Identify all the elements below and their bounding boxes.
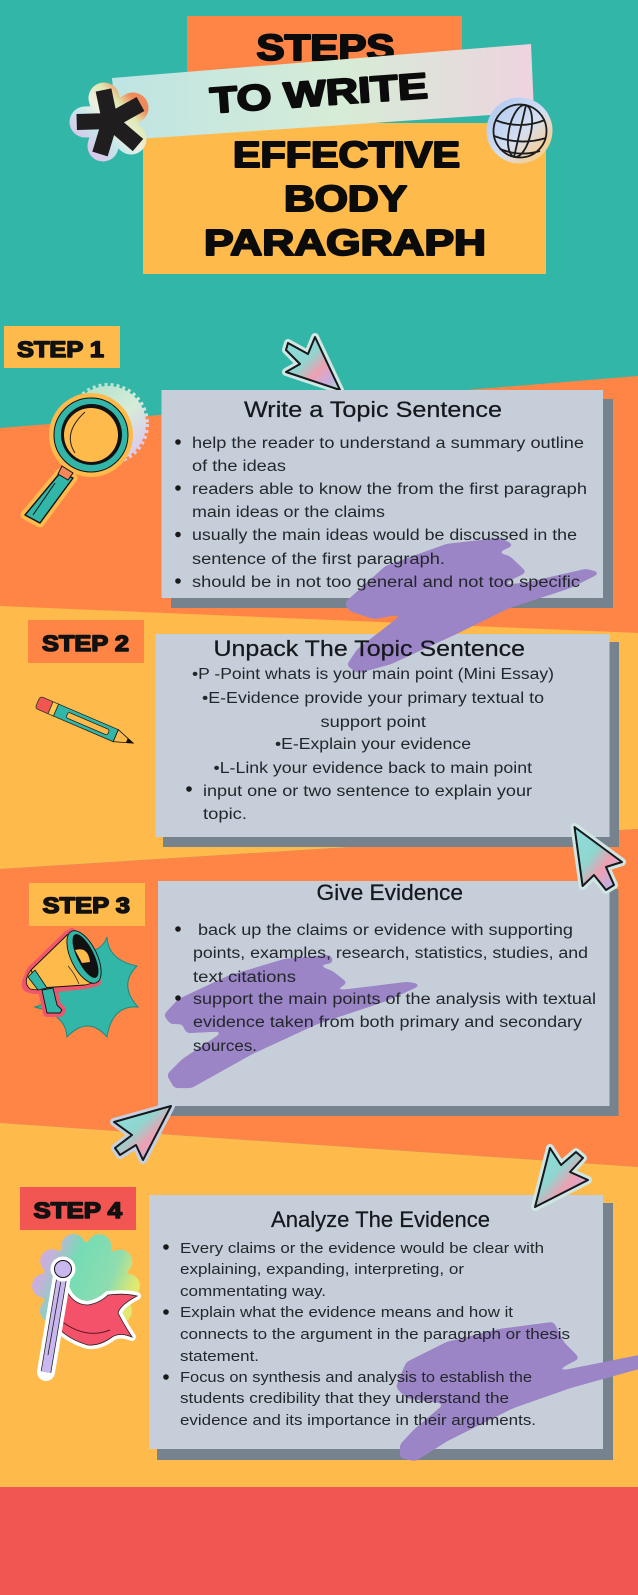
- panel shadow: [171, 399, 613, 608]
- bullet list: back up the claims or evidence with supporting: [198, 922, 573, 939]
- brush stroke: [165, 956, 419, 1087]
- bullet list: main ideas or the claims: [192, 504, 385, 521]
- bullet list: sentence of the first paragraph.: [192, 551, 445, 568]
- step 1 label: STEP 1: [17, 337, 104, 362]
- icon: pencil: [35, 696, 136, 749]
- bullet list: Focus on synthesis and analysis to establish the: [180, 1369, 532, 1386]
- panel shadow: [157, 1203, 613, 1460]
- panel card: [158, 881, 610, 1106]
- icon: cursor 4: [535, 1148, 588, 1207]
- bullet list: [163, 1240, 570, 1429]
- title block: [77, 16, 552, 274]
- heading: PARAGRAPH: PARAGRAPH: [204, 222, 486, 263]
- step 2 label: STEP 2: [42, 631, 129, 656]
- bullet list: support the main points of the analysis with textual: [193, 991, 596, 1008]
- text lines: support point: [320, 714, 427, 731]
- icon: cursor 3: [114, 1106, 171, 1160]
- heading: STEPS: STEPS: [256, 27, 394, 68]
- bullet list: Every claims or the evidence would be clear with: [180, 1240, 544, 1257]
- bullet list: text citations: [193, 969, 296, 986]
- icon: globe sticker: [486, 98, 552, 164]
- bullet list: [175, 435, 587, 591]
- panel card: [156, 634, 610, 837]
- panel: step 3: [158, 880, 618, 1116]
- text lines: input one or two sentence to explain your: [203, 783, 532, 800]
- step 4 label: STEP 4: [34, 1198, 123, 1223]
- heading: EFFECTIVE: EFFECTIVE: [233, 134, 460, 175]
- panel shadow: [168, 889, 618, 1116]
- panel card: [149, 1195, 603, 1449]
- icon: megaphone with burst: [26, 926, 138, 1037]
- bullet list: [175, 922, 596, 1055]
- panel: step 2: [156, 634, 619, 847]
- background: yellow band 1: [0, 606, 638, 869]
- icon: flag: [42, 1242, 137, 1372]
- brush stroke overlap: [348, 634, 456, 672]
- bullet list: should be in not too general and not too specific: [192, 574, 580, 591]
- text lines: •P -Point whats is your main point (Mini Essay): [192, 666, 554, 683]
- bullet list: statement.: [180, 1348, 259, 1365]
- brush stroke: [397, 1323, 638, 1460]
- step 1 label: [4, 326, 120, 368]
- heading: BODY: BODY: [284, 178, 407, 219]
- bullet list: students credibility that they understand the: [180, 1390, 509, 1407]
- panel card: [162, 390, 603, 598]
- step 4 label: [20, 1187, 136, 1230]
- text lines: topic.: [203, 806, 247, 823]
- heading: TO WRITE: TO WRITE: [209, 65, 429, 121]
- bullet list: evidence taken from both primary and secondary: [193, 1014, 582, 1031]
- heading: Unpack The Topic Sentence: [214, 636, 525, 661]
- icon: asterisk sticker: [77, 90, 140, 154]
- text lines: •L-Link your evidence back to main point: [214, 760, 533, 777]
- bullet list: help the reader to understand a summary outline: [192, 435, 584, 452]
- text lines: [186, 666, 554, 823]
- step 2 label: [28, 620, 144, 663]
- bullet list: connects to the argument in the paragraph or thesis: [180, 1326, 570, 1343]
- heading: Write a Topic Sentence: [244, 397, 502, 422]
- step 3 label: STEP 3: [42, 893, 130, 918]
- brush stroke: [346, 539, 598, 672]
- text lines: •E-Explain your evidence: [275, 736, 471, 753]
- panel shadow: [163, 642, 619, 847]
- icon: cursor 1: [286, 337, 340, 390]
- bullet list: sources.: [193, 1038, 257, 1055]
- bullet list: of the ideas: [192, 458, 286, 475]
- bullet list: usually the main ideas would be discussed in the: [192, 527, 577, 544]
- icon: magnifying glass: [25, 385, 147, 523]
- bullet list: points, examples, research, statistics, studies, and: [193, 945, 588, 962]
- text lines: •E-Evidence provide your primary textual to: [202, 690, 544, 707]
- title: yellow box: [143, 123, 546, 274]
- panel: step 4: [149, 1195, 638, 1460]
- panel: step 1: [162, 390, 613, 672]
- background: orange band 1: [0, 376, 638, 640]
- icon: cursor 2: [574, 827, 622, 890]
- bullet list: readers able to know the from the first paragraph: [192, 481, 587, 498]
- background: yellow band 2: [0, 1123, 638, 1487]
- bullet list: Explain what the evidence means and how it: [180, 1304, 514, 1321]
- title: holographic ribbon: [112, 44, 534, 140]
- bullet list: explaining, expanding, interpreting, or: [180, 1261, 464, 1278]
- background: orange band 2: [0, 829, 638, 1167]
- step 3 label: [29, 883, 145, 926]
- title: orange box: [187, 16, 462, 86]
- bullet list: commentating way.: [180, 1283, 326, 1300]
- bullet list: evidence and its importance in their arguments.: [180, 1412, 536, 1429]
- background: red footer: [0, 1487, 638, 1595]
- heading: Give Evidence: [316, 880, 463, 905]
- heading: Analyze The Evidence: [271, 1207, 490, 1232]
